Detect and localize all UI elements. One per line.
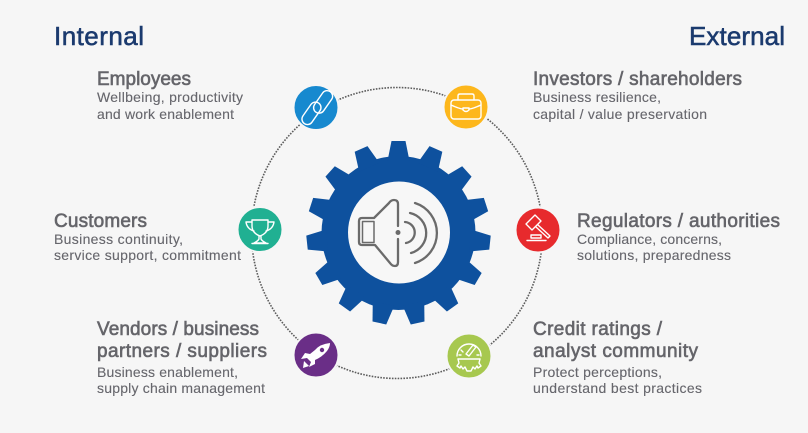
text: credit ratings: understand best practices	[533, 380, 702, 396]
text: employees: Wellbeing, productivity	[97, 89, 243, 105]
icon: vendors rocket	[294, 332, 338, 378]
icon: employees link	[294, 85, 338, 130]
text: regulators	[577, 211, 780, 263]
icon: investors briefcase	[444, 84, 488, 130]
text: employees: Employees	[97, 69, 191, 90]
text: credit ratings: Credit ratings /	[533, 319, 663, 340]
text: vendors	[97, 319, 267, 396]
text: regulators: Regulators / authorities	[577, 211, 780, 232]
text: vendors: partners / suppliers	[97, 341, 267, 362]
central gear	[306, 141, 491, 325]
text: employees	[97, 69, 243, 122]
text: investors	[533, 69, 742, 122]
heading: External: External	[689, 21, 785, 51]
dotted ring	[252, 88, 542, 378]
text: investors: capital / value preservation	[533, 106, 707, 122]
text: vendors: supply chain management	[97, 380, 265, 396]
text: credit ratings: Protect perceptions,	[533, 364, 662, 380]
icon: regulators gavel	[516, 208, 560, 252]
text: investors: Business resilience,	[533, 89, 661, 105]
text: customers	[54, 211, 241, 263]
text: vendors: Vendors / business	[97, 319, 259, 340]
text: customers: Customers	[54, 211, 147, 232]
text: regulators: Compliance, concerns,	[577, 231, 722, 247]
text: vendors: Business enablement,	[97, 364, 238, 380]
text: customers: service support, commitment	[54, 247, 241, 263]
text: investors: Investors / shareholders	[533, 69, 742, 90]
text: credit ratings	[533, 319, 702, 396]
text: employees: and work enablement	[97, 106, 234, 122]
text: regulators: solutions, preparedness	[577, 247, 731, 263]
text: credit ratings: analyst community	[533, 341, 698, 362]
icon: credit ratings gauge gear	[446, 334, 492, 378]
icon: customers trophy	[238, 207, 282, 252]
icon: speaker	[359, 200, 437, 266]
text: customers: Business continuity,	[54, 231, 183, 247]
heading: Internal: Internal	[54, 21, 144, 51]
